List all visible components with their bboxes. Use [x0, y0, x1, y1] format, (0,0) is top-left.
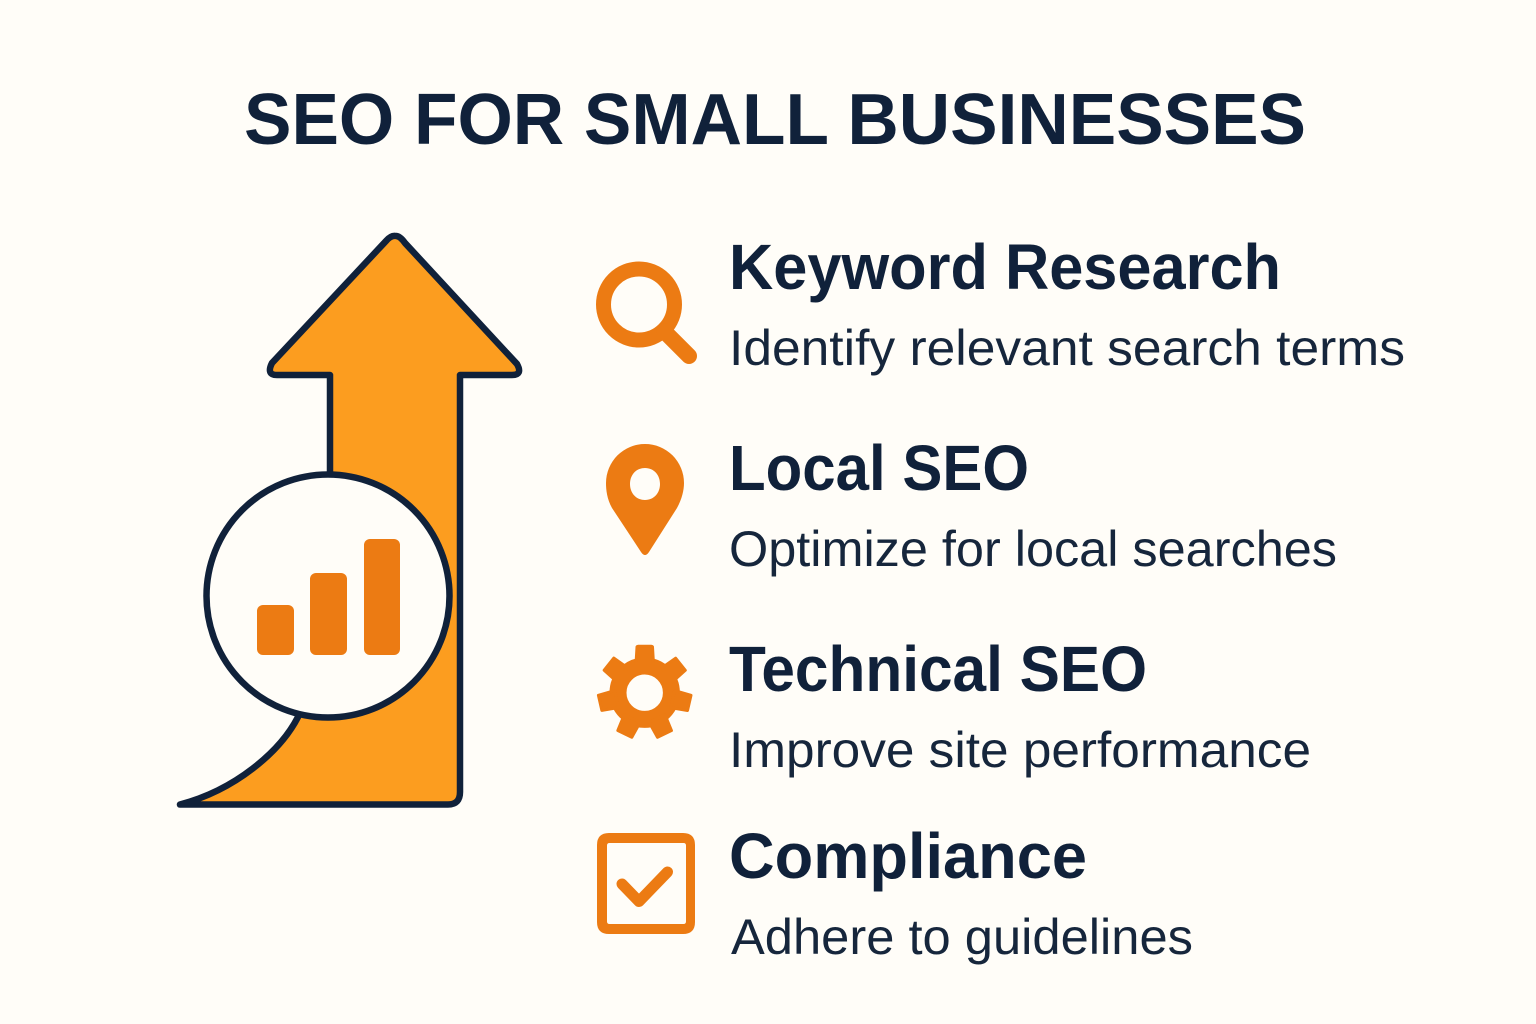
icon: gear [598, 646, 691, 738]
text: keyword research description: Identify relevant search terms [729, 320, 1405, 376]
magnifier circle [206, 474, 450, 718]
heading: local seo: Local SEO [729, 432, 1029, 504]
heading: keyword research: Keyword Research [729, 231, 1281, 303]
text: local seo description: Optimize for local searches [729, 521, 1337, 577]
text: technical seo description: Improve site performance [729, 722, 1311, 778]
title: SEO FOR SMALL BUSINESSES [244, 80, 1306, 160]
icon: location pin [606, 444, 684, 555]
icon: checkbox [597, 833, 695, 934]
icon: magnifying glass [604, 269, 689, 356]
illustration: growth arrow with chart magnifier [180, 236, 519, 804]
heading: technical seo: Technical SEO [729, 633, 1147, 705]
arrow [180, 236, 519, 804]
text: compliance description: Adhere to guidelines [731, 909, 1193, 965]
heading: compliance: Compliance [729, 820, 1087, 892]
bar chart icon [257, 539, 400, 655]
